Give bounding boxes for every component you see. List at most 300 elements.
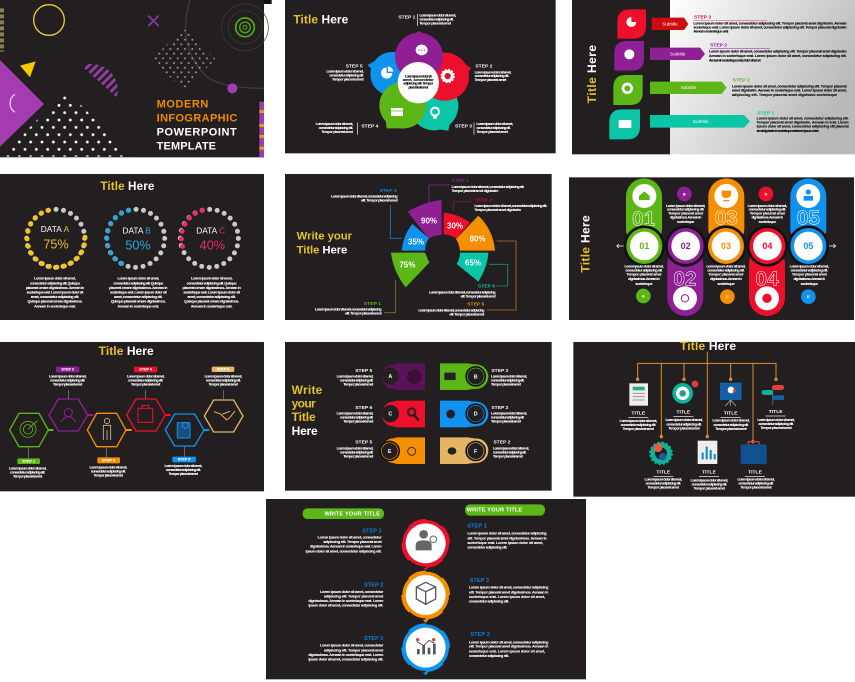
striped strip right <box>259 102 264 157</box>
text A: Tempor placerat amet <box>626 273 662 277</box>
wedge: blue 35% <box>402 224 429 251</box>
step 3 text <box>455 122 513 135</box>
badge B: B <box>683 192 686 196</box>
icon: board <box>720 383 742 406</box>
text B: consectetur adipiscing elit. <box>667 208 704 212</box>
right text 2 <box>469 578 548 604</box>
badge B <box>677 187 692 201</box>
left text 2: ipsum dolor sit amet, consectetur adipiscing elit. <box>308 604 383 608</box>
badge D <box>759 187 773 201</box>
step 1 text <box>398 14 456 26</box>
text: step 6: Lorem ipsum dolor sit amet, <box>204 375 242 379</box>
text D: consectetur adipiscing elit. <box>749 208 786 212</box>
icon: gear with pin <box>650 442 672 464</box>
step blue <box>331 188 398 202</box>
step orange: Lorem ipsum dolor sit amet, consectetur adipiscing <box>418 309 484 313</box>
striped half circle <box>82 64 118 97</box>
tag B green: B <box>474 374 478 380</box>
leaf: purple <box>614 41 644 71</box>
petal: teal <box>410 82 458 131</box>
item: top 2: Tempor placerat amet <box>668 426 700 430</box>
text: step 4: Tempor placerat amet <box>131 382 161 386</box>
text: step 2 <box>49 375 87 386</box>
text right 2: Lorem ipsum dolor sit amet, <box>491 411 527 415</box>
text: step 1: Lorem ipsum dolor sit amet, <box>9 466 47 470</box>
pill 01 green: 01 <box>632 207 655 230</box>
item: top 4: Tempor placerat amet <box>760 426 792 430</box>
icon: bar chart <box>698 441 717 464</box>
item: bottom 3: TITLE <box>748 469 763 475</box>
wedge: orange 80% <box>456 216 495 251</box>
step blue: elit. Tempor placerat amet <box>361 198 398 202</box>
right text 1: elit. Tempor placerat amet dignissimos. Aenean in <box>467 536 547 540</box>
pill 03 orange <box>708 178 744 247</box>
text A: Aenean in scelerisque erat. <box>34 304 76 308</box>
text B: Tempor placerat amet <box>668 212 704 216</box>
text right 3 <box>493 440 529 459</box>
label: data A <box>41 224 70 251</box>
ring: red <box>402 519 450 570</box>
title: Title <box>292 410 316 424</box>
step 2 text: Tempor placerat amet <box>475 78 507 82</box>
pill 04 red <box>749 246 785 316</box>
arrow: red <box>652 18 688 30</box>
wedge: red 30%: 30% <box>447 222 463 231</box>
text E: Tempor placerat amet <box>792 273 828 277</box>
petal: purple <box>395 31 443 81</box>
item: top 1: Lorem ipsum dolor sit amet, <box>620 419 657 423</box>
cover title: INFOGRAPHIC <box>157 113 237 125</box>
item: top 3: Tempor placerat amet <box>715 427 747 431</box>
circle 03 <box>705 225 747 267</box>
pill: step 1: STEP 1 <box>22 459 35 463</box>
left text 1: adipiscing elit. Tempor placerat amet <box>323 540 382 544</box>
item: top 1: Tempor placerat amet <box>623 427 655 431</box>
right text 2: Lorem ipsum dolor sit amet, consectetur adipiscing <box>469 586 548 590</box>
wedge: teal 65%: 65% <box>465 258 481 267</box>
text right 2: Tempor placerat amet <box>491 419 522 423</box>
item: bottom 3 <box>737 469 775 489</box>
step 2 text: STEP 2 <box>475 63 493 69</box>
text B: scelerisque <box>677 220 694 224</box>
icon: chat <box>416 45 428 55</box>
icon: person search <box>416 530 437 550</box>
text E: Lorem ipsum dolor sit amet, <box>790 265 829 269</box>
text: step 2: consectetur adipiscing elit. <box>50 379 85 383</box>
label: data C <box>196 225 225 252</box>
text: step 1 teal: Tempor placerat amet dignissim. Aenean in erat. Lorem <box>757 121 849 125</box>
step 4 text: Tempor placerat amet <box>321 130 354 134</box>
left text 1: Lorem ipsum dolor sit amet, consectetur <box>318 535 382 539</box>
circle 05 <box>788 225 829 267</box>
text: step 5: consectetur adipiscing elit. <box>166 468 201 472</box>
slide 7: hexagon chain <box>0 342 264 491</box>
text: step 1 green: Lorem ipsum dolor sit amet, consectetur adipiscing elit. Tempor placerat <box>732 85 847 89</box>
left title pill <box>303 508 384 519</box>
text left 1: Lorem ipsum dolor sit amet, <box>337 375 374 379</box>
step blue: Lorem ipsum dolor sit amet, consectetur adipiscing <box>331 194 398 198</box>
step red <box>474 197 547 212</box>
left text 1: STEP 3 <box>362 528 382 534</box>
text B: dignissimos. Aenean in <box>670 216 701 220</box>
item: bottom 1: Tempor placerat amet <box>648 485 680 489</box>
text: step 1 teal: ipsum dolor sit amet, consectetur adipiscing elit placerat <box>757 125 849 129</box>
cover title: POWERPOINT <box>157 127 237 139</box>
right text 3: Lorem ipsum dolor sit amet, consectetur adipiscing <box>469 640 548 644</box>
title <box>297 230 353 256</box>
arrow: red: Subtitle <box>662 22 678 27</box>
step 3 text: STEP 3 <box>455 123 472 129</box>
text: step 2: Tempor placerat amet <box>53 382 83 386</box>
text A: consectetur adipiscing elit. Quisque <box>30 281 80 285</box>
text A <box>26 277 84 308</box>
leaf: red <box>617 9 646 39</box>
leaf: green <box>613 75 643 105</box>
pill: step 2 <box>56 367 79 372</box>
text E: scelerisque <box>801 282 818 286</box>
text C <box>182 277 241 308</box>
text: step 3 <box>693 14 847 34</box>
left text 1 <box>306 528 382 553</box>
step teal: Lorem ipsum dolor sit amet, consectetur adipiscing <box>429 291 496 295</box>
text D <box>748 204 787 224</box>
icon: bulb <box>431 108 439 119</box>
item: bottom 1: Lorem ipsum dolor sit amet, <box>645 477 682 481</box>
step 3 text: Lorem ipsum dolor sit amet, <box>476 122 513 126</box>
text: step 3: Lorem ipsum dolor sit amet, consectetur adipiscing elit. Tempor placerat amet dignissim. Aenean <box>693 21 847 25</box>
text: step 1 teal <box>757 111 849 133</box>
right text 2: consectetur adipiscing elit. <box>469 600 509 604</box>
tag E orange: E <box>388 449 392 455</box>
ring: orange <box>402 571 450 623</box>
step teal: STEP 6 <box>478 283 495 289</box>
wedge: red 30% <box>444 213 470 238</box>
hex: tan <box>204 400 243 432</box>
badge A <box>636 289 651 303</box>
title: your <box>292 397 316 411</box>
title: Write your <box>297 230 353 242</box>
text: step 3: Lorem ipsum dolor sit amet, <box>89 466 127 470</box>
text C: Lorem ipsum dolor sit amet, <box>191 277 233 281</box>
icon: gear <box>441 70 454 82</box>
item: bottom 3: consectetur adipiscing elit. <box>738 481 774 485</box>
purple dot <box>227 83 237 93</box>
text: step 1 teal: amet dignissim in scelerisque erat lorem ipsum dolor <box>757 129 820 133</box>
text B: Quisque placerat ornare dignissimos. <box>111 300 166 304</box>
tag C red <box>382 401 425 427</box>
text: step 1 teal: Lorem ipsum dolor sit amet, consectetur adipiscing elit. <box>757 116 849 120</box>
text left 2 <box>337 405 374 423</box>
right text 2: STEP 3 <box>470 578 489 584</box>
text C: Tempor placerat amet <box>708 273 744 277</box>
cover title <box>157 98 237 153</box>
circle 05: 05 <box>803 241 813 251</box>
text: step 3: scelerisque erat. Lorem ipsum dolor sit amet, consectetur adipiscing elit. Tempor placerat dignissim <box>693 25 847 29</box>
text B: consectetur adipiscing elit. Quisque <box>113 281 163 285</box>
circle 02 <box>665 225 706 267</box>
text D: Tempor placerat amet <box>750 212 786 216</box>
text: step 4: consectetur adipiscing elit. <box>128 379 163 383</box>
text C <box>706 265 746 286</box>
tag C red: C <box>388 412 392 418</box>
slide 4: dotted progress rings <box>0 174 264 320</box>
item: top 4: TITLE <box>769 409 783 415</box>
step teal: elit. Tempor placerat amet <box>461 295 496 299</box>
text: step 3: Tempor placerat amet <box>94 474 124 478</box>
text: step 2 <box>709 43 847 62</box>
text D: Lorem ipsum dolor sit amet, <box>748 204 787 208</box>
icon: box <box>416 582 436 604</box>
step 1 text: Lorem ipsum dolor sit amet, <box>419 14 456 18</box>
badge E: E <box>807 295 810 299</box>
text right 3: Lorem ipsum dolor sit amet, <box>493 447 529 451</box>
purple diamond <box>0 60 44 147</box>
title: Title Here <box>99 344 154 358</box>
text B <box>109 277 167 308</box>
center text circle: adipiscing elit. Tempor <box>403 82 434 86</box>
left text 1: ipsum dolor sit amet, consectetur adipiscing elit. <box>306 549 382 553</box>
petal: green <box>379 82 426 129</box>
text: step 5: Tempor placerat amet <box>169 472 199 476</box>
text B: scelerisque erat. Lorem ipsum dolor sit <box>110 290 167 294</box>
crescent <box>10 94 15 112</box>
text: step 2: Aenean in scelerisque erat. Lorem ipsum dolor sit amet, consectetur adipiscing elit. <box>709 54 847 58</box>
left text 3: Lorem ipsum dolor sit amet, consectetur <box>320 644 384 648</box>
text C: scelerisque <box>717 282 735 286</box>
text D: dignissimos. Aenean in <box>751 216 783 220</box>
slide 6: numbered pills <box>569 177 854 320</box>
label: data C: 40% <box>200 238 225 252</box>
text left 1: STEP 5 <box>355 368 373 374</box>
tag D blue <box>440 401 488 427</box>
hex: orange <box>87 413 132 447</box>
text C: Aenean in scelerisque erat. <box>191 304 232 308</box>
slide 8: tags <box>285 342 552 491</box>
text B: placerat ornare dignissimos. Aenean in <box>109 286 167 290</box>
text B: amet, consectetur adipiscing elit. <box>114 295 163 299</box>
step 1 text: consectetur adipiscing elit. <box>419 18 454 22</box>
text: step 4: Lorem ipsum dolor sit amet, <box>127 375 165 379</box>
dotted diamond <box>152 28 216 90</box>
item: bottom 1: TITLE <box>656 469 671 475</box>
ring: blue <box>402 624 450 675</box>
vertical title: Title Here <box>585 45 599 103</box>
text left 1 <box>337 368 374 386</box>
step 4 text: Lorem ipsum dolor sit amet, <box>316 122 353 126</box>
label: data A: 75% <box>43 237 69 251</box>
text: step 1 green: adipiscing elit. Tempor placerat amet dignissim scelerisque <box>732 93 837 97</box>
text E: dignissimos. Aenean in <box>793 277 825 281</box>
text: step 2: Lorem ipsum dolor sit amet, consectetur adipiscing elit. Tempor placerat amet dignissim <box>709 50 847 54</box>
arrow: purple: Subtitle <box>670 51 686 56</box>
text A: Lorem ipsum dolor sit amet, <box>34 277 76 281</box>
icon: card <box>391 108 403 116</box>
label: data C: DATA C <box>196 225 225 235</box>
text right 1 <box>491 368 527 386</box>
center text circle <box>398 62 439 103</box>
step 5 text: STEP 5 <box>346 63 363 69</box>
step 4 text <box>316 122 379 135</box>
wedge: purple 90%: 90% <box>421 216 437 225</box>
text: step 3: Aenean scelerisque erat <box>693 30 729 34</box>
tag A purple <box>382 363 425 390</box>
text left 3 <box>337 440 374 459</box>
step purple <box>452 178 525 193</box>
text left 3: consectetur adipiscing elit. <box>340 451 374 455</box>
step 5 text: consectetur adipiscing elit. <box>329 73 364 77</box>
label: data B: 50% <box>125 238 151 252</box>
text E: consectetur adipiscing elit. <box>791 269 828 273</box>
right text 1: scelerisque erat. Lorem ipsum dolor sit amet, <box>467 541 543 545</box>
text A <box>624 265 664 286</box>
text: step 1: consectetur adipiscing elit. <box>10 470 45 474</box>
item: bottom 1: consectetur adipiscing elit. <box>646 481 681 485</box>
left text 3 <box>308 636 384 662</box>
text A: consectetur adipiscing elit. <box>625 269 663 273</box>
pill 04 red: 04 <box>756 267 779 290</box>
step orange: elit. Tempor placerat amet <box>449 313 485 317</box>
pill: step 4 <box>134 367 157 372</box>
circle 02: 02 <box>681 241 691 251</box>
text: step 2: Aenean in scelerisque erat, dolor sit amet <box>709 58 761 62</box>
label: data A: DATA A <box>41 224 70 234</box>
text: step 1: Tempor placerat amet <box>13 474 43 478</box>
arrows <box>617 244 836 248</box>
step green: Lorem ipsum dolor sit amet, consectetur adipiscing <box>315 307 382 311</box>
item: top 4 <box>757 409 795 430</box>
yellow circle <box>34 5 64 35</box>
step purple: STEP 1 <box>452 178 469 184</box>
step green <box>315 301 382 315</box>
pill: step 3 <box>97 457 120 463</box>
step purple: Tempor placerat amet dignissim <box>452 189 499 193</box>
text C: Lorem ipsum dolor sit amet, <box>706 265 746 269</box>
wedge: green 75%: 75% <box>399 261 415 270</box>
text right 1: Tempor placerat amet <box>491 382 522 386</box>
step purple: Lorem ipsum dolor sit amet, consectetur adipiscing elit. <box>452 185 525 189</box>
pill: step 4: STEP 4 <box>139 368 153 372</box>
dotted triangle <box>2 90 132 157</box>
item: top 1: TITLE <box>631 410 646 416</box>
item: top 3: consectetur adipiscing elit. <box>713 423 749 427</box>
label: data B <box>122 225 151 252</box>
title <box>292 383 323 438</box>
item: top 3: TITLE <box>724 410 738 416</box>
title: Title Here <box>680 339 736 353</box>
wedge: teal 65% <box>457 253 488 282</box>
wedge: blue 35%: 35% <box>408 237 424 246</box>
title: Title Here <box>293 12 349 26</box>
text A: scelerisque erat. Lorem ipsum dolor sit <box>27 290 84 294</box>
text E <box>790 265 829 286</box>
text: step 4 <box>127 375 165 386</box>
text A: placerat ornare dignissimos. Aenean in <box>26 286 84 290</box>
text: step 6: consectetur adipiscing elit. <box>206 379 241 383</box>
purple cross <box>148 16 159 26</box>
slide 3: leaf arrows <box>572 0 855 154</box>
step 4 text: consectetur adipiscing elit. <box>319 126 353 130</box>
title: Title Here <box>297 244 347 256</box>
text: step 3: STEP 3 <box>694 14 711 20</box>
yellow triangle <box>20 61 36 77</box>
right title pill: WRITE YOUR TITLE <box>467 508 523 514</box>
text right 3: Tempor placerat amet <box>493 455 524 459</box>
right text 3: consectetur adipiscing elit. <box>469 654 509 658</box>
slide 10: circular steps <box>266 499 586 679</box>
text A: Quisque placerat ornare dignissimos. <box>27 300 82 304</box>
text: step 3: consectetur adipiscing elit. <box>91 470 126 474</box>
label: data B: DATA B <box>122 225 151 235</box>
left text 3: STEP 3 <box>364 636 383 642</box>
step orange <box>418 302 485 317</box>
pill: step 2: STEP 2 <box>61 368 74 372</box>
item: bottom 3: Lorem ipsum dolor sit amet, <box>737 477 775 481</box>
text left 2: STEP 6 <box>355 405 373 411</box>
text A: Lorem ipsum dolor sit amet, <box>624 265 664 269</box>
tag A purple: A <box>388 374 392 380</box>
slide 1: cover <box>0 0 272 157</box>
arrow: teal: Subtitle <box>693 119 709 124</box>
thin arc line <box>186 0 264 88</box>
center text circle: placerat sit amet <box>408 85 429 89</box>
text: step 5: Lorem ipsum dolor sit amet, <box>164 464 202 468</box>
step 1 text: STEP 1 <box>398 15 416 21</box>
text D: scelerisque <box>759 220 776 224</box>
item: top 2: consectetur adipiscing elit. <box>666 422 702 426</box>
text left 2: Lorem ipsum dolor sit amet, <box>337 411 374 415</box>
pill: step 5 <box>172 457 196 462</box>
step red: STEP 2 <box>475 197 492 203</box>
icon: pie <box>381 66 393 79</box>
ring: data B <box>107 209 165 267</box>
item: top 2 <box>665 410 703 430</box>
step 3 text: consectetur adipiscing elit. <box>476 126 511 130</box>
text: step 1 <box>9 466 47 478</box>
slide 2: petal diagram <box>285 0 556 153</box>
text: step 2: STEP 2 <box>710 43 727 49</box>
connectors <box>384 185 516 313</box>
item: top 3: Lorem ipsum dolor sit amet, <box>712 419 750 423</box>
item: bottom 1 <box>645 469 682 489</box>
wedge: purple 90% <box>408 200 442 239</box>
right text 2: scelerisque erat. Lorem ipsum dolor sit amet, <box>469 595 545 599</box>
text C: consectetur adipiscing elit. Quisque <box>187 281 237 285</box>
item: top 1 <box>620 410 657 431</box>
left text 2: dignissimos. Aenean in scelerisque erat. Lorem <box>308 599 384 603</box>
hex: blue <box>165 414 209 446</box>
pill: step 5: STEP 5 <box>178 458 190 462</box>
step 3 text: Tempor placerat amet <box>476 130 509 134</box>
icon: document <box>629 383 648 406</box>
text: step 1 teal: STEP 1 <box>757 111 775 117</box>
text C: scelerisque erat. Lorem ipsum dolor sit <box>183 290 241 294</box>
tag B green <box>440 363 488 390</box>
text A: dignissimos. Aenean in <box>628 277 660 281</box>
item: bottom 2: Tempor placerat amet <box>694 486 726 490</box>
text left 3: Lorem ipsum dolor sit amet, <box>337 447 374 451</box>
text C: Quisque placerat ornare dignissimos. <box>184 300 239 304</box>
circle 04 <box>747 225 788 267</box>
text right 2: STEP 2 <box>491 405 509 411</box>
ring: data A <box>27 209 85 267</box>
text A: amet, consectetur adipiscing elit. <box>31 295 79 299</box>
step 2 text <box>475 63 512 82</box>
hex: red <box>127 399 171 431</box>
hex: green <box>10 413 53 447</box>
text right 3: consectetur adipiscing elit. <box>493 451 527 455</box>
cover title: TEMPLATE <box>157 141 216 153</box>
icon: growth chart <box>416 638 436 654</box>
